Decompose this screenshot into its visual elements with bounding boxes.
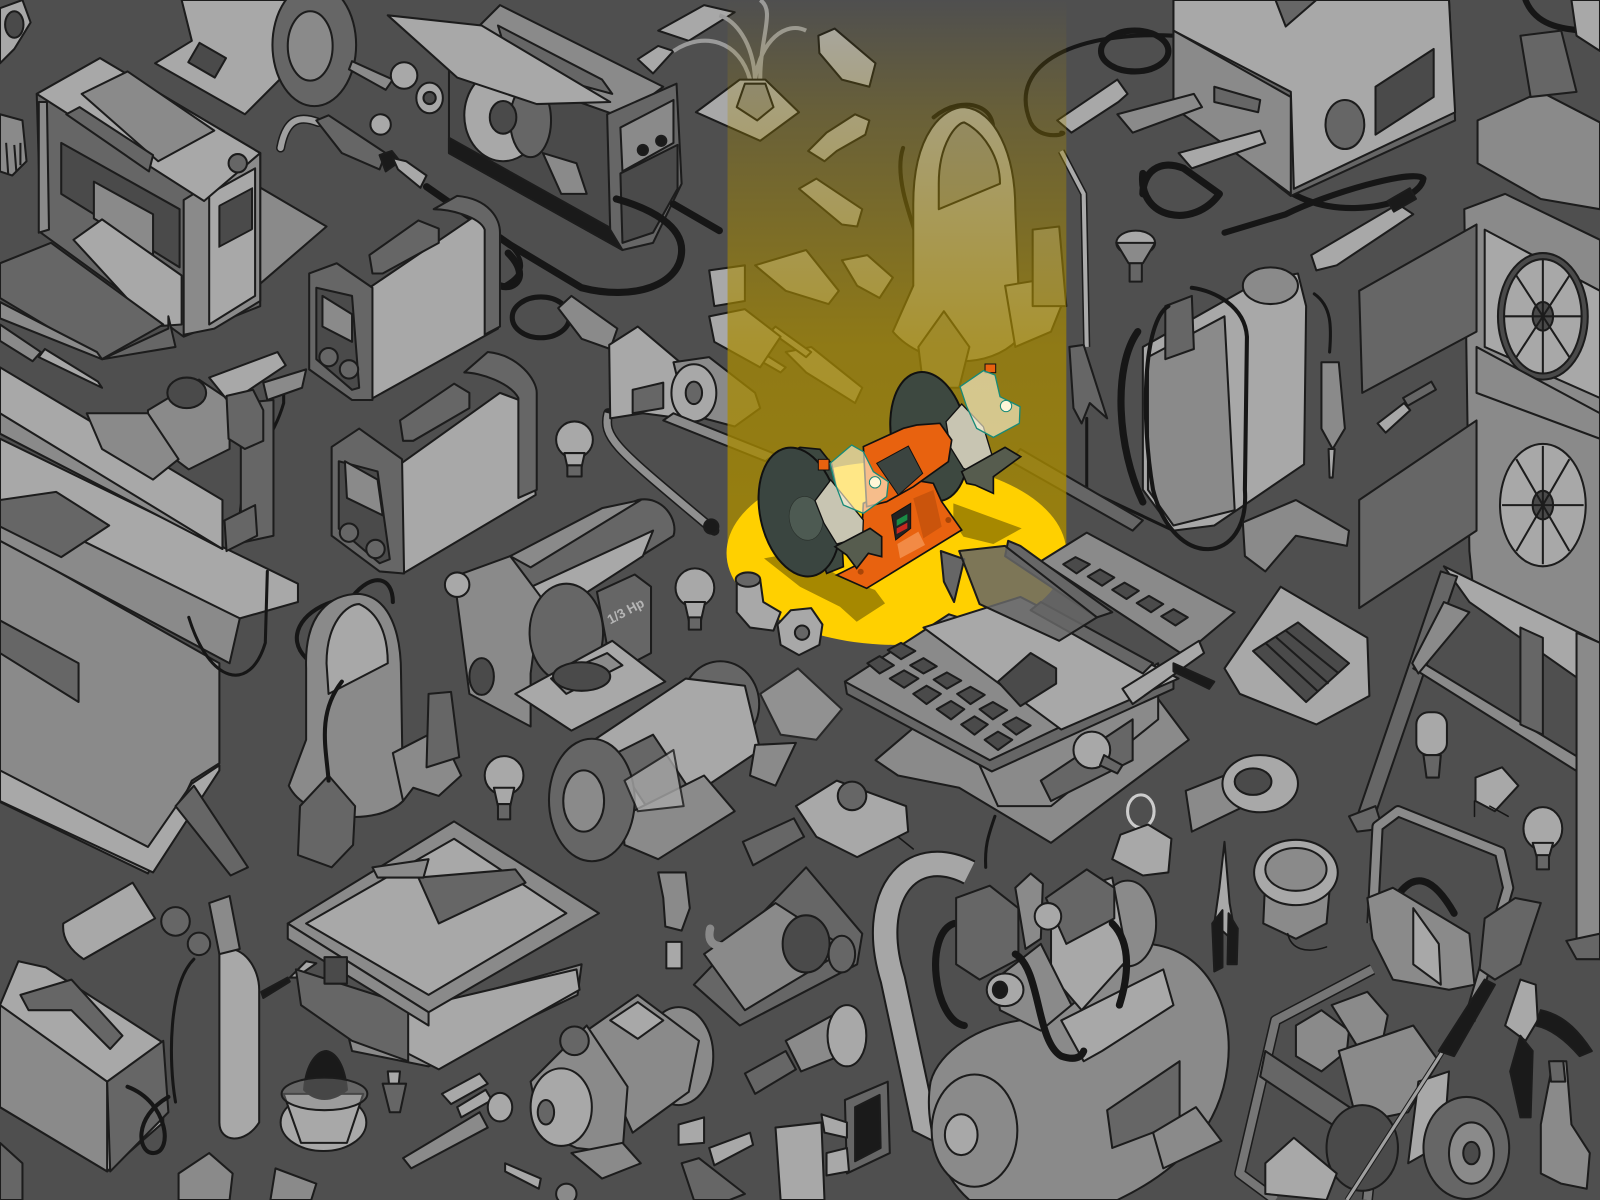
gear puller — [1541, 1061, 1590, 1189]
cutters — [1505, 980, 1592, 1117]
plant and tile at beam top — [638, 0, 876, 141]
gas valve cartridge — [743, 781, 913, 865]
recessed lamp — [1254, 840, 1338, 950]
ground clamps — [1057, 80, 1416, 270]
clamp under tank — [1243, 500, 1349, 571]
small fitting top left — [0, 0, 31, 63]
jointer fence and knob — [87, 352, 306, 551]
small black chisel — [261, 961, 316, 998]
adjusting knobs — [818, 364, 996, 470]
plastic pipe welder — [512, 296, 776, 534]
switch plates — [679, 1082, 890, 1200]
pressure tank pump — [885, 864, 1229, 1200]
power cable saw to tank — [986, 816, 995, 867]
small clamp fitting — [658, 872, 690, 968]
inverter welder lower — [332, 352, 537, 573]
left tool rest — [835, 528, 882, 568]
table saw — [845, 533, 1235, 843]
spotlit water pump — [893, 105, 1066, 388]
padlock timer — [1112, 795, 1171, 876]
sprayer tank — [1121, 267, 1345, 549]
MIG welder cabinet — [388, 5, 682, 250]
left wheel and stone — [747, 440, 863, 584]
planer — [0, 58, 327, 359]
drain bracket — [1224, 587, 1369, 724]
spark plug right — [1378, 382, 1436, 433]
small hand parts — [403, 1073, 541, 1189]
right wheel guard and stone — [881, 366, 995, 508]
spark plug — [383, 1071, 406, 1112]
right eye shield — [960, 371, 1020, 437]
bulb — [556, 421, 593, 477]
bulb fourth — [1523, 807, 1562, 869]
bench grinder fragment top — [155, 0, 356, 114]
small bell fitting — [1116, 231, 1155, 282]
small capacitor — [1474, 767, 1518, 816]
plasma cutter top right — [1026, 0, 1455, 233]
left eye shield — [830, 445, 888, 513]
beam of light — [728, 0, 1066, 556]
pliers — [1212, 842, 1238, 971]
terminal clamp — [349, 61, 443, 135]
wire brush — [0, 114, 27, 176]
pedestal base — [837, 480, 962, 588]
bulb second — [676, 568, 714, 630]
belt sander — [445, 499, 674, 731]
jointer — [0, 367, 298, 876]
welder bottom left — [0, 961, 168, 1171]
centrifugal pump — [531, 995, 713, 1179]
water pump gray — [289, 580, 461, 867]
grinder motor — [863, 423, 952, 507]
inverter welder upper — [309, 196, 519, 400]
cfl lamp — [1416, 712, 1447, 778]
bulb third — [485, 756, 523, 819]
pipe cutter — [745, 1005, 866, 1094]
pipe ring fitting — [1186, 755, 1298, 832]
drain strainer — [281, 1051, 367, 1151]
switch box — [892, 503, 911, 540]
bench grinder gray — [549, 661, 842, 861]
band saw — [1349, 194, 1600, 959]
orange bench grinder — [747, 364, 1022, 622]
floor shadows — [764, 503, 1022, 622]
portable belt sander — [694, 867, 862, 1026]
spotlight pool — [727, 461, 1066, 645]
lathe corner top right — [1478, 0, 1600, 209]
right tool rest — [962, 447, 1021, 493]
belt sander: 1/3 Hp — [605, 595, 647, 627]
gas cylinder — [161, 896, 259, 1139]
foil roll — [63, 883, 155, 959]
bottom edge scraps — [0, 1143, 577, 1200]
spotlit fittings — [709, 114, 893, 403]
pressure washer — [1240, 811, 1541, 1200]
small table saw — [288, 821, 599, 1069]
welding torch and cables — [281, 115, 719, 292]
valve in light — [736, 572, 781, 631]
star knob — [778, 608, 822, 655]
sprayer wand — [1010, 151, 1173, 531]
screwdriver — [0, 324, 102, 388]
